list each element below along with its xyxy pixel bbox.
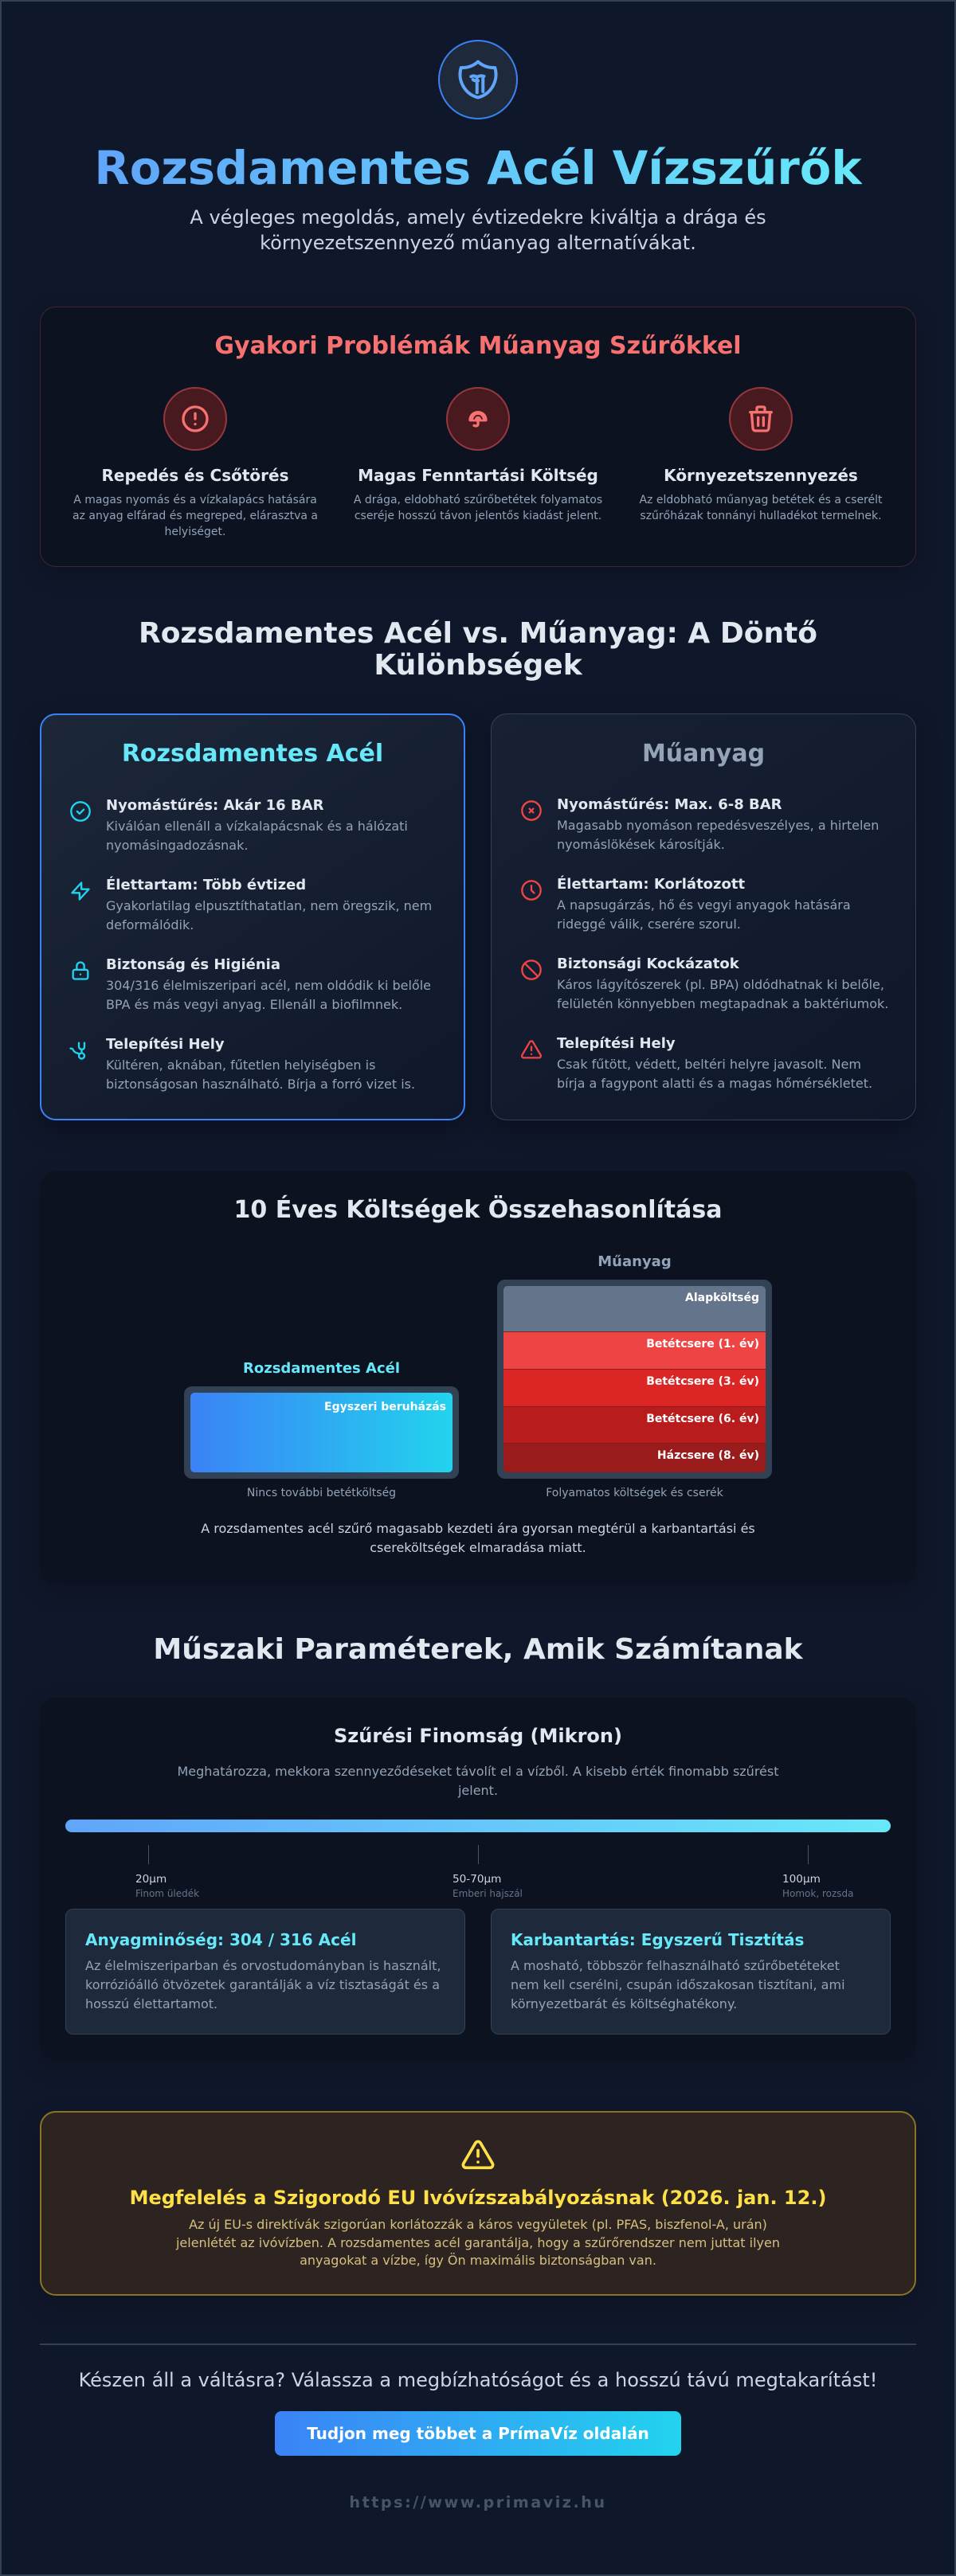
icon: warning (462, 2140, 494, 2169)
panel: cost comparison (40, 1171, 916, 1583)
heading: comparison (139, 617, 817, 682)
problem: high cost: Magas Fenntartási Költség (358, 466, 598, 485)
chart: plastic stacked bar (497, 1280, 772, 1479)
subtitle: A végleges megoldás, amely évtizedekre kiváltja a drága és (190, 206, 766, 229)
button: learn more (275, 2411, 681, 2456)
link: website: https://www.primaviz.hu (349, 2493, 607, 2512)
heading: EU regulation: Megfelelés a Szigorodó EU Ivóvízszabályozásnak (2026. jan. 12.) (130, 2187, 826, 2209)
problem: pollution: szűrőházak tonnányi hulladékot termelnek. (640, 510, 882, 522)
segment: cartridge year 3 (503, 1370, 766, 1407)
feature: pressure: Kiválóan ellenáll a vízkalapácsnak és a hálózati (106, 819, 408, 834)
feature: lifespan: A napsugárzás, hő és vegyi anyagok hatására (557, 897, 851, 913)
segment: base cost: Alapköltség (685, 1292, 759, 1304)
problem: high cost (354, 466, 602, 522)
label: plastic bar: Műanyag (598, 1253, 672, 1270)
text: fineness description: jelent. (458, 1783, 498, 1798)
text: EU regulation (175, 2217, 780, 2268)
heading: technical parameters: Műszaki Paraméterek, Amik Számítanak (153, 1633, 803, 1666)
heading: stainless steel: Rozsdamentes Acél (122, 740, 383, 768)
tick: 100 micron: 100µm (782, 1873, 821, 1886)
icon: bolt (71, 881, 90, 901)
problem: cracking: az anyag elfárad és megreped, elárasztva a (72, 510, 318, 522)
feature: pressure (557, 796, 879, 852)
problem: high cost: A drága, eldobható szűrőbetétek folyamatos (354, 494, 602, 506)
icon: warning (521, 1040, 542, 1059)
feature: pressure: Nyomástűrés: Akár 16 BAR (106, 797, 323, 814)
segment: cartridge year 1: Betétcsere (1. év) (646, 1338, 759, 1351)
feature: pressure: nyomáslökések károsítják. (557, 837, 725, 852)
text: EU regulation: Az új EU-s direktívák szigorúan korlátozzák a káros vegyületek (pl. PFAS, biszfenol-A, urán) (189, 2217, 767, 2232)
text: material quality (85, 1958, 441, 2011)
icon: high cost (446, 387, 510, 451)
tick: 20 micron: 20µm (135, 1873, 167, 1886)
tick: 50-70 micron: Emberi hajszál (453, 1888, 523, 1899)
problem: high cost: cseréje hosszú távon jelentős kiadást jelent. (355, 510, 601, 522)
segment: cartridge year 3: Betétcsere (3. év) (646, 1375, 759, 1388)
title: Rozsdamentes Acél Vízszűrők (94, 142, 862, 195)
caption: plastic: Folyamatos költségek és cserék (546, 1487, 723, 1499)
icon: check (70, 801, 91, 822)
feature: lifespan (557, 876, 851, 932)
segment: one-time investment: Egyszeri beruházás (324, 1401, 446, 1413)
problem: cracking: A magas nyomás és a vízkalapács hatására (73, 494, 317, 506)
feature: lifespan: rideggé válik, cserére szorul. (557, 917, 741, 932)
chart: steel bar (184, 1386, 459, 1479)
feature: lifespan: Gyakorlatilag elpusztíthatatlan, nem öregszik, nem (106, 898, 432, 913)
problem: cracking: Repedés és Csőtörés (102, 466, 288, 485)
heading: problems: Gyakori Problémák Műanyag Szűrőkkel (214, 332, 742, 360)
text: maintenance (511, 1958, 845, 2011)
segment: cartridge year 6: Betétcsere (6. év) (646, 1413, 759, 1425)
feature: installation: biztonságosan használható. Bírja a forró vizet is. (106, 1077, 415, 1092)
caption: steel: Nincs további betétköltség (247, 1487, 396, 1499)
feature: safety: 304/316 élelmiszeripari acél, nem oldódik ki belőle (106, 978, 431, 993)
heading: comparison: Különbségek (374, 648, 582, 682)
feature: safety: BPA és más vegyi anyag. Ellenáll a biofilmnek. (106, 997, 402, 1012)
feature: lifespan: Élettartam: Korlátozott (557, 876, 745, 893)
problem: pollution: Az eldobható műanyag betétek és a cserélt (639, 494, 883, 506)
tick: 50-70 micron (453, 1845, 523, 1899)
feature: lifespan: deformálódik. (106, 917, 194, 932)
panel: problems with plastic filters (40, 307, 916, 567)
button: learn more: Tudjon meg többet a PrímaVíz oldalán (307, 2424, 649, 2443)
panel: technical parameters (40, 1698, 916, 2059)
feature: installation: bírja a fagypont alatti és a magas hőmérsékletet. (557, 1076, 872, 1091)
tick: 20 micron: Finom üledék (135, 1888, 199, 1899)
panel: EU regulation callout (40, 2111, 916, 2296)
problem: pollution: Környezetszennyezés (664, 466, 858, 485)
icon: clock (521, 880, 542, 901)
icon: waste bin (729, 387, 793, 451)
feature: pressure: Nyomástűrés: Max. 6-8 BAR (557, 796, 782, 813)
segment: one-time investment (190, 1393, 453, 1472)
text: EU regulation: anyagokat a vízbe, így Ön maximális biztonságban van. (300, 2253, 656, 2268)
tick: 100 micron (782, 1845, 854, 1899)
text: maintenance: környezetbarát és költséghatékony. (511, 1996, 737, 2011)
text: material quality: korrózióálló ötvözetek garantálják a víz tisztaságát és a (85, 1977, 440, 1992)
feature: installation (557, 1035, 872, 1091)
text: maintenance: nem kell cserélni, csupán időszakosan tisztítani, ami (511, 1977, 845, 1992)
feature: pressure: nyomásingadozásnak. (106, 838, 248, 853)
icon: cracking alert (163, 387, 227, 451)
icon: ban (521, 960, 542, 980)
feature: safety risks (557, 956, 888, 1011)
icon: shield with filter (438, 40, 518, 119)
problem: pollution (639, 466, 883, 522)
heading: material quality: Anyagminőség: 304 / 316 Acél (85, 1930, 356, 1949)
feature: lifespan (106, 876, 432, 932)
chart: micron scale bar (65, 1820, 891, 1832)
heading: maintenance: Karbantartás: Egyszerű Tisztítás (511, 1930, 804, 1949)
segment: housing year 8 (503, 1444, 766, 1472)
feature: lifespan: Élettartam: Több évtized (106, 877, 306, 893)
tick: 50-70 micron: 50-70µm (453, 1873, 501, 1886)
panel: stainless steel (40, 713, 465, 1120)
segment: housing year 8: Házcsere (8. év) (657, 1449, 759, 1462)
card: maintenance (491, 1909, 891, 2035)
subtitle (190, 206, 766, 254)
feature: installation: Telepítési Hely (557, 1035, 676, 1052)
text: call to action: Készen áll a váltásra? Válassza a megbízhatóságot és a hosszú távú megtakarítást! (79, 2369, 877, 2391)
heading: filtration fineness: Szűrési Finomság (Mikron) (334, 1725, 622, 1747)
icon: x circle (521, 800, 542, 821)
divider (40, 2343, 916, 2345)
text: cost summary: csereköltségek elmaradása miatt. (370, 1540, 586, 1555)
text: fineness description: Meghatározza, mekkora szennyeződéseket távolít el a vízből. A kisebb érték finomabb szűrést (177, 1764, 779, 1779)
text: material quality: Az élelmiszeriparban és orvostudományban is használt, (85, 1958, 441, 1973)
feature: safety risks: Biztonsági Kockázatok (557, 956, 739, 972)
heading: cost comparison: 10 Éves Költségek Összehasonlítása (234, 1196, 722, 1224)
text: cost summary (201, 1521, 755, 1555)
problem: cracking (72, 466, 318, 538)
feature: installation: Csak fűtött, védett, beltéri helyre javasolt. Nem (557, 1057, 861, 1072)
panel: plastic (491, 713, 916, 1120)
label: steel bar: Rozsdamentes Acél (243, 1360, 400, 1377)
feature: safety: Biztonság és Higiénia (106, 956, 280, 973)
tick: 100 micron: Homok, rozsda (782, 1888, 854, 1899)
text: cost summary: A rozsdamentes acél szűrő magasabb kezdeti ára gyorsan megtérül a karbantartási és (201, 1521, 755, 1536)
text: material quality: hosszú élettartamot. (85, 1996, 217, 2011)
feature: installation: Kültéren, aknában, fűtetlen helyiségben is (106, 1057, 375, 1073)
text: maintenance: A mosható, többször felhasználható szűrőbetéteket (511, 1958, 840, 1973)
problem: cracking: helyiséget. (165, 526, 225, 538)
segment: base cost (503, 1286, 766, 1332)
heading: plastic: Műanyag (642, 740, 765, 768)
heading: comparison: Rozsdamentes Acél vs. Műanyag: A Döntő (139, 617, 817, 650)
segment: cartridge year 6 (503, 1407, 766, 1444)
icon: lock (72, 961, 89, 980)
tick: 20 micron (135, 1845, 199, 1899)
card: material quality (65, 1909, 465, 2035)
feature: safety risks: felületén könnyebben megtapadnak a baktériumok. (557, 996, 888, 1011)
feature: installation (106, 1036, 415, 1092)
icon: outdoor placement (69, 1042, 86, 1060)
feature: safety risks: Káros lágyítószerek (pl. BPA) oldódhatnak ki belőle, (557, 977, 884, 992)
feature: pressure (106, 797, 408, 853)
feature: safety (106, 956, 431, 1012)
subtitle: környezetszennyező műanyag alternatívákat. (260, 232, 696, 254)
text: EU regulation: jelenlétét az ivóvízben. A rozsdamentes acél garantálja, hogy a szűrőrendszer nem juttat ilyen (176, 2234, 780, 2250)
feature: installation: Telepítési Hely (106, 1036, 225, 1053)
segment: cartridge year 1 (503, 1332, 766, 1370)
feature: pressure: Magasabb nyomáson repedésveszélyes, a hirtelen (557, 818, 879, 833)
text: fineness description (177, 1764, 779, 1798)
